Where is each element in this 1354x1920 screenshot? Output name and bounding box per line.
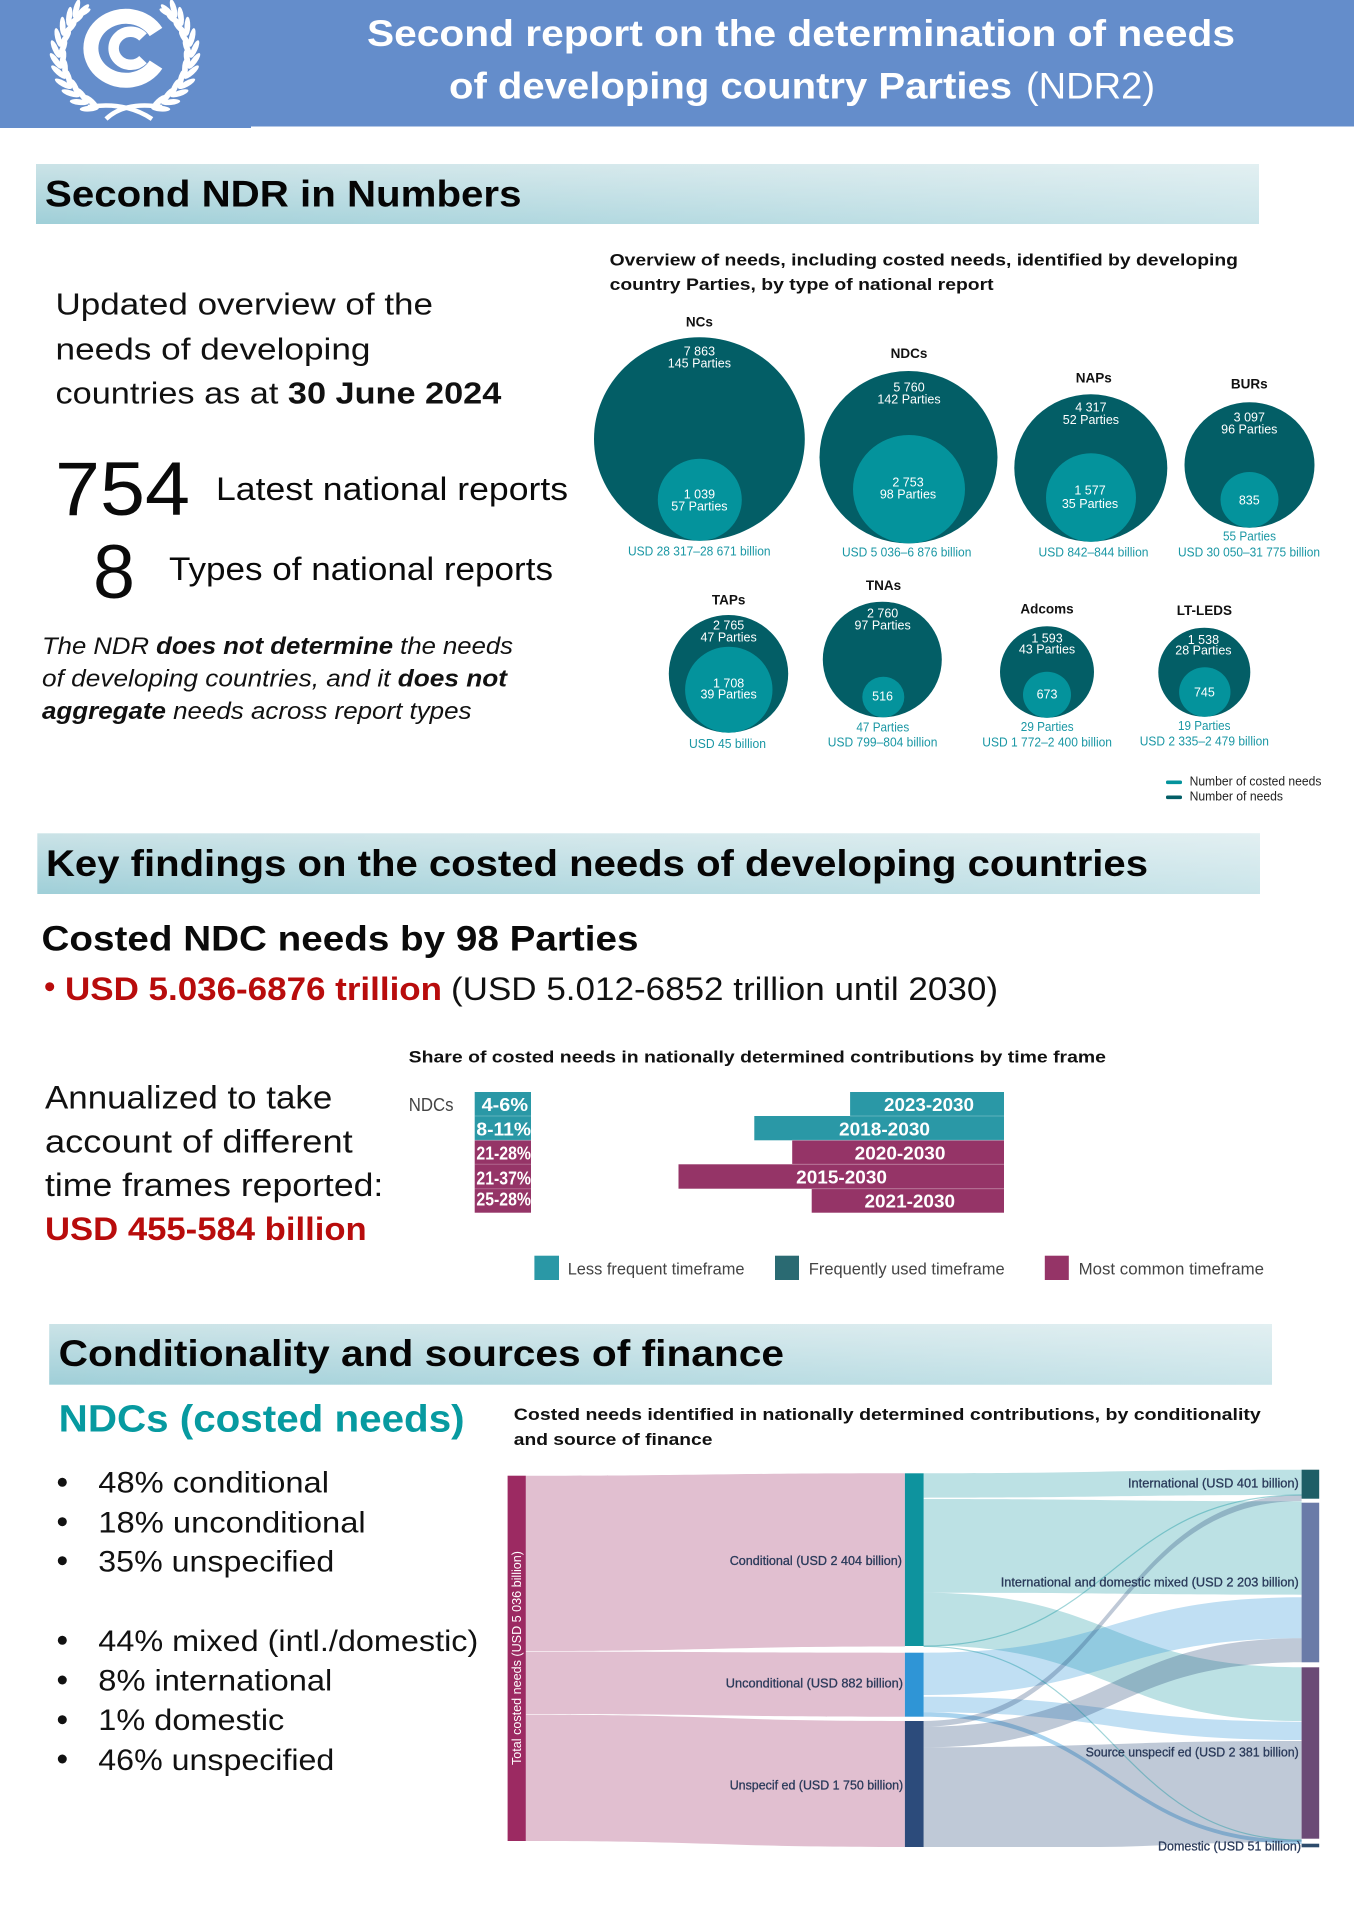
bubble: TAPs: TAPs <box>712 592 745 607</box>
text block: updated overview: Updated overview of the <box>56 286 433 321</box>
bubble: NDCs: 2 753 <box>892 476 924 490</box>
stat: 8 types of national reports: 8 <box>93 530 135 615</box>
bubble: NCs: 7 863 <box>684 345 715 359</box>
bubble: NDCs: 98 Parties <box>880 488 936 502</box>
bubble: TAPs: 47 Parties <box>700 631 757 645</box>
legend: Frequently used timeframe <box>809 1259 1005 1278</box>
text block: annualized: time frames reported: <box>45 1167 383 1203</box>
bubble: BURs: 96 Parties <box>1221 422 1277 436</box>
heading: Key findings <box>37 833 1260 894</box>
bubble: NDCs <box>820 346 998 560</box>
bubble: NCs: 57 Parties <box>671 499 728 513</box>
bubble: BURs <box>1178 376 1320 560</box>
note: NDR does not determine <box>42 633 513 725</box>
bubble: LT-LEDS <box>1140 603 1269 748</box>
bubble: NAPs: USD 842–844 billion <box>1038 545 1148 560</box>
key figure: USD trillion range: (USD 5.012-6852 trillion until 2030) <box>451 971 998 1007</box>
legend: bubble chart: Number of needs <box>1190 789 1283 803</box>
bubble: Adcoms: 43 Parties <box>1019 642 1075 656</box>
bubble: LT-LEDS: 745 <box>1194 686 1215 700</box>
title: of developing country Parties <box>449 66 1012 106</box>
time frame bars: 2018-2030 <box>839 1119 930 1139</box>
note: NDR does not determine: of developing countries, and it does not <box>42 666 508 693</box>
text block: annualized: account of different <box>45 1123 353 1159</box>
list: source shares: 44% mixed (intl./domestic) <box>98 1625 478 1658</box>
text block: annualized: USD 455-584 billion <box>45 1211 367 1247</box>
bubble: NDCs: 142 Parties <box>877 393 941 407</box>
bubble: TNAs: TNAs <box>866 578 901 593</box>
node labels: Domestic (USD 51 billion) <box>1158 1839 1301 1854</box>
share column: 21-37% <box>476 1168 531 1188</box>
list: conditionality shares: 18% unconditional <box>98 1506 366 1539</box>
share column: 25-28% <box>476 1190 531 1210</box>
text block: updated overview: countries as at 30 June 2024 <box>56 375 502 410</box>
bubble: TAPs: 2 765 <box>713 618 744 632</box>
list: source shares: 8% international <box>98 1665 332 1698</box>
bubble: NAPs: 52 Parties <box>1063 413 1119 427</box>
bubble: TAPs: 39 Parties <box>700 688 757 702</box>
bubble: NAPs: 4 317 <box>1075 401 1107 415</box>
bubble: BURs: USD 30 050–31 775 billion <box>1178 545 1320 560</box>
thin conditional links <box>924 1495 1302 1840</box>
bubble: NAPs: NAPs <box>1076 371 1112 386</box>
bubble: Adcoms: 1 593 <box>1031 632 1063 646</box>
heading: Conditionality <box>49 1324 1272 1385</box>
subheading: NDCs costed needs: NDCs (costed needs) <box>59 1399 465 1441</box>
node labels: International and domestic mixed (USD 2 203 billion) <box>1001 1575 1299 1590</box>
bubble: TNAs: 97 Parties <box>854 618 911 632</box>
chart title: overview of needs <box>610 251 1238 294</box>
bubble: NCs: USD 28 317–28 671 billion <box>628 544 771 559</box>
flows: conditional to source <box>924 1470 1302 1721</box>
bubble: NAPs: 1 577 <box>1074 484 1106 498</box>
stat: 754 latest national reports <box>55 447 568 532</box>
bubble: TNAs: 516 <box>872 689 893 703</box>
share column: 4-6% <box>482 1095 528 1115</box>
time frame bars: 2021-2030 <box>864 1192 955 1212</box>
bubble: TAPs <box>669 592 788 751</box>
bubble: Adcoms: 29 Parties <box>1021 719 1074 734</box>
chart: share of costed needs by time frame <box>409 1047 1264 1280</box>
title <box>367 13 1235 106</box>
note: NDR does not determine: aggregate needs across report types <box>42 698 472 725</box>
bubble: LT-LEDS: LT-LEDS <box>1177 603 1232 618</box>
heading: Second NDR in Numbers: Second NDR in Numbers <box>45 174 522 215</box>
bubble: BURs: BURs <box>1231 376 1268 391</box>
heading: Key findings: Key findings on the costed needs of developing countries <box>46 843 1148 884</box>
heading: Conditionality: Conditionality and sources of finance <box>59 1333 784 1374</box>
heading: Second NDR in Numbers <box>36 164 1259 224</box>
legend <box>534 1256 1264 1280</box>
text block: annualized: Annualized to take <box>45 1079 332 1115</box>
node labels: Unspecif ed (USD 1 750 billion) <box>730 1777 903 1792</box>
key figure: USD trillion range: USD 5.036-6876 trillion <box>65 971 442 1007</box>
bubble: NDCs: NDCs <box>891 346 927 361</box>
bubble: NDCs: 5 760 <box>893 381 925 395</box>
chart title: Share of costed needs in nationally determined contributions by time frame <box>409 1047 1106 1066</box>
time frame bars: 2020-2030 <box>855 1143 945 1163</box>
text block: updated overview: needs of developing <box>56 331 370 366</box>
bubble: NCs <box>594 315 805 559</box>
stat: 754 latest national reports: Latest national reports <box>216 471 568 507</box>
share column: 8-11% <box>476 1119 531 1139</box>
title: Second report on the determination of needs <box>367 13 1235 54</box>
note: NDR does not determine: The NDR does not determine the needs <box>42 633 513 660</box>
node labels <box>509 1476 1301 1854</box>
bubble: TAPs: 1 708 <box>713 676 744 690</box>
row label: NDCs <box>409 1095 454 1115</box>
node labels: Source unspecif ed (USD 2 381 billion) <box>1086 1745 1299 1760</box>
bubble: TNAs: USD 799–804 billion <box>828 735 937 750</box>
bubble: NCs: 1 039 <box>684 487 715 501</box>
bubble: BURs: 835 <box>1239 494 1260 508</box>
share column <box>475 1092 531 1213</box>
subheading: Costed NDC needs: Costed NDC needs by 98 Parties <box>42 920 638 959</box>
bubble: Adcoms <box>982 601 1112 750</box>
bubble: NAPs: 35 Parties <box>1062 497 1118 511</box>
bubble: Adcoms: USD 1 772–2 400 billion <box>982 735 1112 750</box>
chart title: sankey: Costed needs identified in nationally determined contributions, by conditionality <box>514 1405 1261 1424</box>
list: conditionality shares: 48% conditional <box>98 1467 329 1500</box>
time frame bars <box>678 1092 1004 1213</box>
list: conditionality shares <box>58 1467 366 1579</box>
sankey chart <box>508 1470 1319 1854</box>
title: (NDR2) <box>1026 66 1155 106</box>
legend: bubble chart: Number of costed needs <box>1190 774 1321 788</box>
node labels: Total costed needs (USD 5 036 billion) <box>509 1551 524 1765</box>
chart title: overview of needs: Overview of needs, including costed needs, identified by developing <box>610 251 1238 270</box>
header banner <box>0 0 1354 128</box>
legend: bubble chart <box>1166 774 1321 803</box>
bubble: BURs: 55 Parties <box>1223 529 1276 544</box>
bubble: NCs: NCs <box>686 315 713 330</box>
stat: 8 types of national reports: Types of national reports <box>169 551 553 587</box>
node labels: Conditional (USD 2 404 billion) <box>730 1553 902 1568</box>
list: source shares <box>58 1625 478 1777</box>
text block: annualized <box>45 1079 383 1247</box>
bubble: NDCs: USD 5 036–6 876 billion <box>842 545 971 560</box>
key figure: USD trillion range <box>45 971 998 1007</box>
chart title: sankey: and source of finance <box>514 1430 712 1449</box>
bubble: Adcoms: Adcoms <box>1020 601 1074 616</box>
bubble: LT-LEDS: 19 Parties <box>1178 718 1231 733</box>
bubble: TAPs: USD 45 billion <box>689 736 766 751</box>
node labels: International (USD 401 billion) <box>1128 1476 1299 1491</box>
bubble: LT-LEDS: USD 2 335–2 479 billion <box>1140 733 1269 748</box>
stat: 754 latest national reports: 754 <box>55 447 190 532</box>
list: source shares: 1% domestic <box>98 1704 284 1737</box>
flows: unconditional to source <box>924 1597 1302 1844</box>
bubble: TNAs: 2 760 <box>867 606 898 620</box>
list: source shares: 46% unspecified <box>98 1744 334 1777</box>
bubble: NCs: 145 Parties <box>668 357 731 371</box>
bubble: TNAs <box>823 578 942 750</box>
time frame bars: 2015-2030 <box>796 1168 887 1188</box>
legend: Most common timeframe <box>1079 1259 1264 1278</box>
flows: total to conditionality <box>526 1473 905 1847</box>
icon: UNFCCC logo <box>47 0 203 119</box>
legend: Less frequent timeframe <box>568 1259 744 1278</box>
time frame bars: 2023-2030 <box>884 1095 974 1115</box>
bubble: Adcoms: 673 <box>1037 688 1057 702</box>
node labels: Unconditional (USD 882 billion) <box>726 1676 903 1691</box>
chart title: sankey <box>514 1405 1261 1449</box>
bubble: NAPs <box>1014 371 1167 560</box>
share column: 21-28% <box>476 1143 531 1163</box>
nodes <box>508 1470 1319 1847</box>
bubble: LT-LEDS: 28 Parties <box>1175 644 1232 658</box>
chart title: overview of needs: country Parties, by type of national report <box>610 275 994 294</box>
flows: unspecified to source <box>924 1495 1302 1847</box>
bubble: TNAs: 47 Parties <box>856 719 910 734</box>
stat: 8 types of national reports <box>93 530 553 615</box>
text block: updated overview <box>56 286 502 410</box>
bubble: LT-LEDS: 1 538 <box>1188 633 1219 647</box>
bubble: BURs: 3 097 <box>1234 410 1265 424</box>
list: conditionality shares: 35% unspecified <box>98 1546 334 1579</box>
